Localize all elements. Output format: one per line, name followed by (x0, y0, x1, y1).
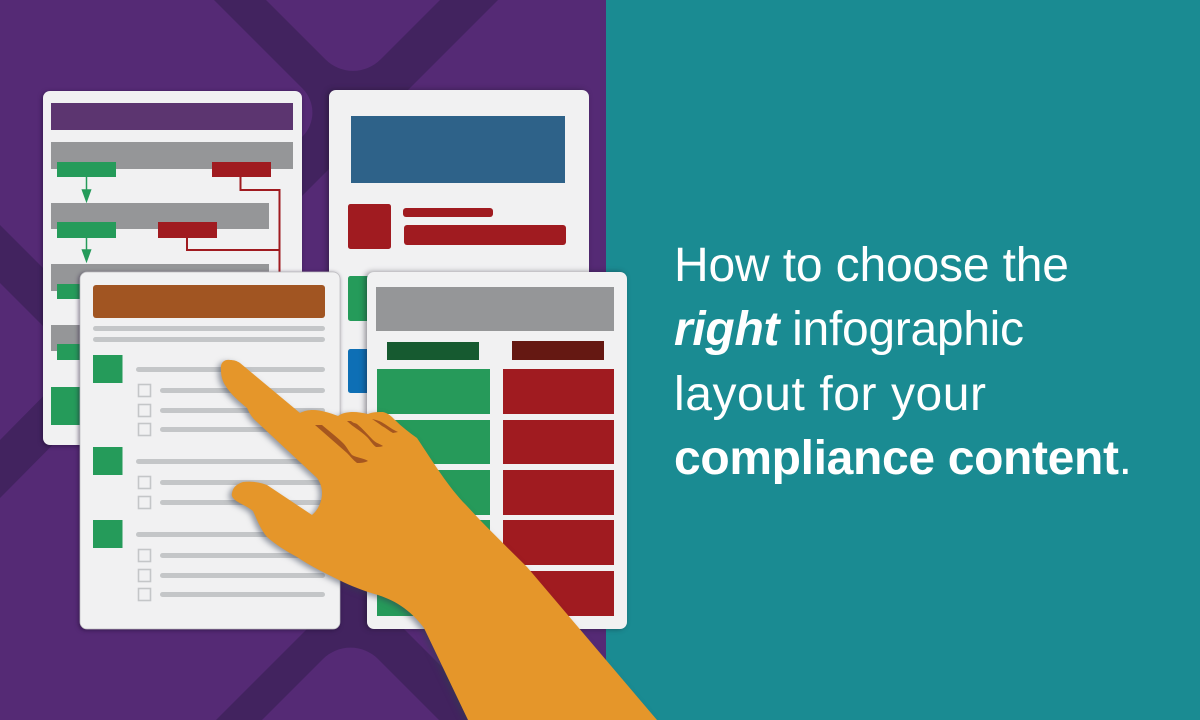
title text: How to choose the (674, 239, 1069, 292)
panel: red and blue card (329, 90, 589, 446)
dark green column heading (387, 342, 479, 360)
checkboxes (138, 384, 150, 600)
icon: pointing hand (221, 360, 657, 720)
arrow: green down 1 (82, 177, 90, 201)
green squares (93, 355, 122, 548)
arrow: green down 2 (82, 238, 90, 261)
flowchart rows (51, 142, 293, 425)
hand crease 1 (315, 425, 368, 463)
flowchart header bar (51, 103, 293, 130)
green column (377, 369, 490, 616)
red column (503, 369, 614, 616)
hand crease 3 (372, 419, 398, 433)
panel: flowchart card (43, 91, 302, 445)
green block (348, 276, 388, 321)
title text: right infographic (674, 303, 1024, 356)
intro lines (93, 326, 325, 342)
panel: checklist card (80, 272, 340, 629)
red short bar (403, 208, 493, 217)
orange header (93, 285, 325, 318)
blue block (348, 349, 388, 393)
title text (674, 239, 1132, 485)
arrow: red connectors (187, 177, 280, 275)
title text: compliance content. (674, 432, 1132, 485)
red long bar (404, 225, 566, 245)
panel: comparison table card (367, 272, 627, 629)
dark red column heading (512, 341, 604, 360)
grey header (376, 287, 614, 331)
hand crease 2 (347, 421, 383, 447)
panel: teal background (606, 0, 1200, 720)
red square (348, 204, 391, 249)
checklist lines (136, 367, 325, 597)
blue header (351, 116, 565, 183)
title text: layout for your (674, 368, 986, 421)
panel: purple lattice background (0, 0, 606, 720)
